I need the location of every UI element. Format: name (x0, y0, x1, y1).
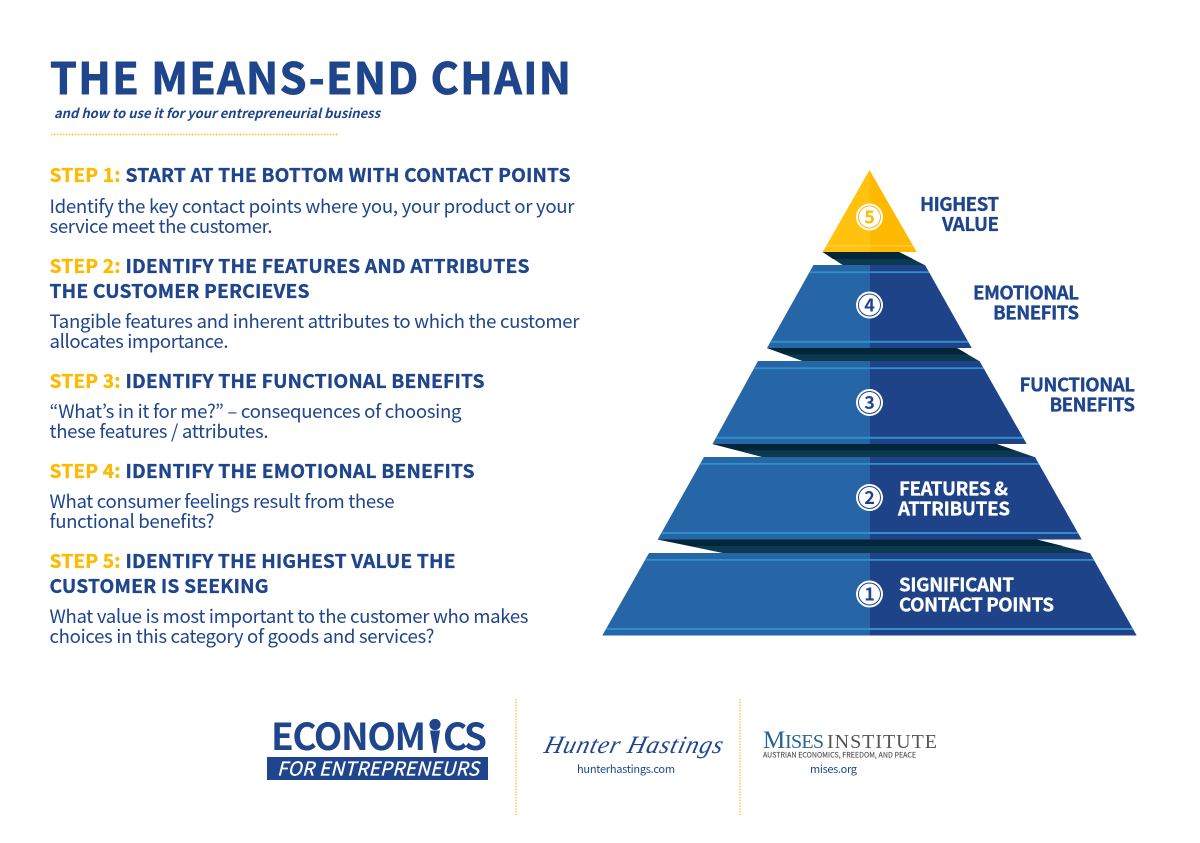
label: functional benefits: BENEFITS (1050, 390, 1135, 418)
step 5 (50, 546, 529, 649)
logo: hunter hastings (541, 731, 727, 777)
label: highest value: VALUE (941, 210, 999, 237)
step 1 (50, 160, 575, 239)
tier 1: significant contact points (600, 553, 1140, 637)
label: emotional benefits (973, 278, 1079, 326)
tier 1: significant contact points: SIGNIFICANT (899, 570, 1014, 598)
title: THE MEANS-END CHAIN (50, 45, 571, 107)
step 1: STEP 1: (50, 160, 120, 188)
step 5: IDENTIFY THE HIGHEST VALUE THE (126, 546, 456, 574)
subtitle: and how to use it for your entrepreneurial business (54, 103, 382, 122)
logo: mises institute (763, 727, 937, 777)
step 2: THE CUSTOMER PERCIEVES (50, 276, 310, 304)
step 4: IDENTIFY THE EMOTIONAL BENEFITS (126, 456, 475, 484)
step 5: What value is most important to the customer who makes (50, 602, 529, 629)
icon: microphone (429, 719, 441, 753)
tier 3: functional benefits: 3 (864, 389, 875, 415)
pyramid (600, 168, 1140, 637)
step 3: STEP 3: (50, 366, 120, 394)
step 1: Identify the key contact points where you, your product or your (50, 192, 575, 219)
tier 2: features and attributes (650, 457, 1090, 541)
step 5: STEP 5: (50, 546, 120, 574)
step 3 (50, 366, 485, 444)
logo: mises institute: AUSTRIAN ECONOMICS, FREEDOM, AND PEACE (763, 750, 916, 760)
step 4: functional benefits? (50, 507, 214, 534)
logo: mises institute: INSTITUTE (827, 731, 937, 753)
tier 5: highest value: 5 (864, 204, 875, 230)
tier 4: emotional benefits: 4 (864, 292, 875, 318)
step 2: IDENTIFY THE FEATURES AND ATTRIBUTES (126, 251, 530, 279)
label: functional benefits (1020, 370, 1135, 418)
step 3: IDENTIFY THE FUNCTIONAL BENEFITS (126, 366, 485, 394)
step 5: choices in this category of goods and services? (50, 622, 434, 649)
step 2 (50, 251, 580, 354)
label: highest value: HIGHEST (920, 190, 999, 217)
shadow under tier 4 (767, 348, 980, 361)
step 1: service meet the customer. (50, 212, 272, 239)
shadow under tier 5 (823, 252, 925, 265)
tier 2: features and attributes: 2 (864, 484, 875, 510)
logo: mises institute: M (763, 727, 785, 754)
step 3: “What’s in it for me?” – consequences of choosing (50, 397, 462, 424)
shadow under tier 3 (712, 444, 1035, 457)
tier 4: emotional benefits (760, 265, 980, 349)
tier 2: features and attributes: ATTRIBUTES (897, 494, 1010, 522)
label: functional benefits: FUNCTIONAL (1020, 370, 1135, 398)
logo: economics for entrepreneurs: CS (443, 707, 487, 761)
logo: hunter hastings: hunterhastings.com (577, 761, 675, 777)
tier 5: highest value (820, 168, 920, 254)
logo: mises institute: ISES (785, 731, 824, 753)
step 2: STEP 2: (50, 251, 120, 279)
label: emotional benefits: EMOTIONAL (973, 278, 1079, 306)
label: highest value (920, 190, 999, 237)
logo: economics for entrepreneurs (267, 707, 488, 782)
logo: economics for entrepreneurs: ECONOM (271, 707, 426, 761)
logo: mises institute: mises.org (810, 761, 858, 777)
step 5: CUSTOMER IS SEEKING (50, 571, 268, 599)
logo: hunter hastings: Hunter Hastings (541, 731, 727, 759)
tier 3: functional benefits (705, 361, 1035, 445)
tier 1: significant contact points: 1 (864, 580, 875, 606)
shadow under tier 2 (658, 540, 1090, 553)
label: emotional benefits: BENEFITS (993, 298, 1079, 326)
logo: economics for entrepreneurs: FOR ENTREPRENEURS (277, 754, 482, 782)
step 4: STEP 4: (50, 456, 120, 484)
step 3: these features / attributes. (50, 417, 268, 444)
step 4: What consumer feelings result from these (50, 487, 394, 514)
tier 2: features and attributes: FEATURES & (899, 474, 1008, 502)
tier 1: significant contact points: CONTACT POINTS (899, 590, 1054, 618)
step 2: allocates importance. (50, 327, 228, 354)
step 4 (50, 456, 475, 534)
step 1: START AT THE BOTTOM WITH CONTACT POINTS (126, 160, 571, 188)
step 2: Tangible features and inherent attributes to which the customer (50, 307, 580, 334)
